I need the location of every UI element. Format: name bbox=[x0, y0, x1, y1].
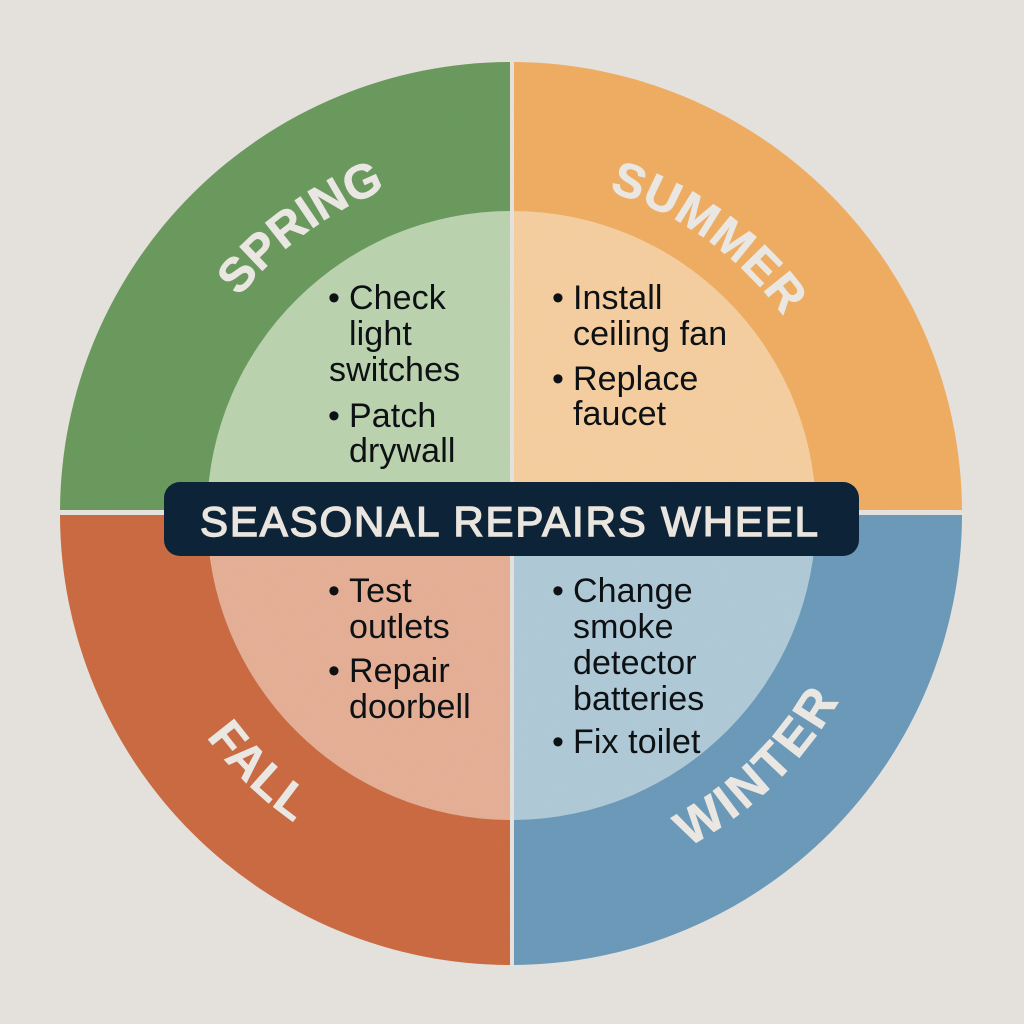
panel: summer bbox=[514, 62, 962, 510]
panel: fall bbox=[60, 515, 510, 965]
list: winter repairs: detector bbox=[573, 644, 697, 682]
list: spring repairs: drywall bbox=[349, 432, 456, 470]
list: winter repairs: • bbox=[552, 723, 564, 761]
list: fall repairs: Test bbox=[349, 572, 412, 610]
list: fall repairs: outlets bbox=[349, 608, 450, 646]
list: winter repairs: • bbox=[552, 572, 564, 610]
list: spring repairs: Check bbox=[349, 279, 447, 317]
list: spring repairs: • bbox=[328, 397, 340, 435]
panel: winter bbox=[514, 515, 962, 965]
list: summer repairs: • bbox=[552, 360, 564, 398]
list: summer repairs bbox=[552, 279, 727, 433]
list: summer repairs: Replace bbox=[573, 360, 698, 398]
title banner: SEASONAL REPAIRS WHEEL bbox=[200, 498, 818, 545]
panel: spring bbox=[60, 62, 510, 510]
list: winter repairs: Fix toilet bbox=[573, 723, 701, 761]
list: summer repairs: • bbox=[552, 279, 564, 317]
list: fall repairs: doorbell bbox=[349, 688, 471, 726]
list: fall repairs: • bbox=[328, 572, 340, 610]
wheel bbox=[60, 62, 962, 965]
list: summer repairs: Install bbox=[573, 279, 663, 317]
list: winter repairs: smoke bbox=[573, 608, 674, 646]
list: fall repairs: • bbox=[328, 652, 340, 690]
heading: summer: SUMMER bbox=[612, 163, 804, 316]
heading: spring: SPRING bbox=[219, 164, 382, 292]
list: spring repairs: light bbox=[349, 315, 412, 353]
list: summer repairs: faucet bbox=[573, 395, 667, 433]
list: fall repairs bbox=[328, 572, 471, 726]
list: fall repairs: Repair bbox=[349, 652, 450, 690]
list: spring repairs bbox=[328, 279, 460, 470]
list: spring repairs: switches bbox=[329, 351, 460, 389]
heading: fall: FALL bbox=[208, 718, 299, 822]
list: winter repairs: batteries bbox=[573, 680, 704, 718]
title banner bbox=[164, 482, 859, 556]
list: summer repairs: ceiling fan bbox=[573, 315, 727, 353]
list: winter repairs bbox=[552, 572, 704, 761]
heading: winter: WINTER bbox=[670, 688, 839, 844]
list: spring repairs: Patch bbox=[349, 397, 436, 435]
list: spring repairs: • bbox=[328, 279, 340, 317]
list: winter repairs: Change bbox=[573, 572, 693, 610]
